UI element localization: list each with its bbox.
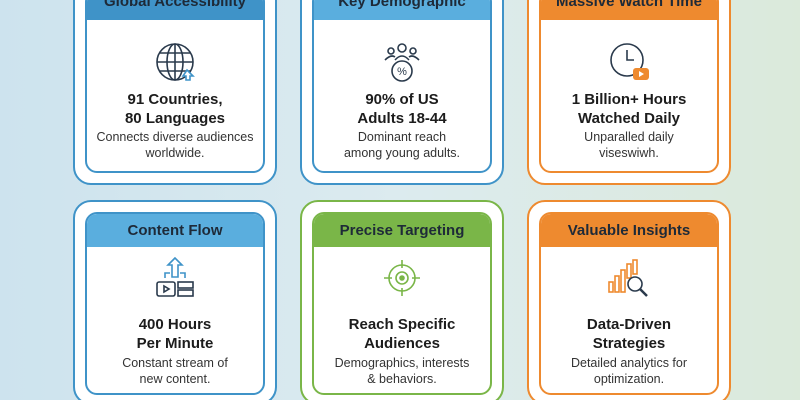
stat: 90% of US bbox=[365, 91, 439, 108]
stat: Reach Specific bbox=[349, 316, 455, 333]
stat: 80 Languages bbox=[125, 110, 225, 127]
card: precise targeting bbox=[300, 200, 504, 400]
stat: Data-Driven bbox=[587, 316, 671, 333]
icon: people percent bbox=[384, 43, 420, 82]
stat: Per Minute bbox=[137, 335, 213, 352]
description: among young adults. bbox=[344, 146, 460, 160]
card: watch time bbox=[527, 0, 731, 185]
description bbox=[344, 130, 460, 160]
header bbox=[87, 214, 263, 247]
header bbox=[87, 0, 263, 20]
icon: clock play bbox=[610, 43, 649, 80]
description bbox=[122, 356, 228, 386]
icon: upload video bbox=[156, 257, 194, 297]
header bbox=[541, 214, 717, 247]
description bbox=[335, 356, 469, 386]
stat bbox=[349, 316, 455, 352]
icon: chart magnifier bbox=[608, 259, 648, 297]
description: viseswiwh. bbox=[599, 146, 659, 160]
description bbox=[584, 130, 674, 160]
icon: people percent: % bbox=[397, 66, 407, 78]
description: & behaviors. bbox=[367, 372, 437, 386]
description bbox=[96, 130, 254, 160]
card: valuable insights bbox=[527, 200, 731, 400]
card: content flow bbox=[73, 200, 277, 400]
icon: target bbox=[384, 260, 420, 296]
stat: 1 Billion+ Hours bbox=[572, 91, 686, 108]
stat bbox=[357, 91, 447, 127]
icon: globe bbox=[156, 43, 195, 81]
header bbox=[314, 214, 490, 247]
description bbox=[571, 356, 687, 386]
description: worldwide. bbox=[145, 146, 205, 160]
description: Detailed analytics for bbox=[571, 356, 687, 370]
header bbox=[541, 0, 717, 20]
stat: 91 Countries, bbox=[127, 91, 223, 108]
description: Unparalled daily bbox=[584, 130, 674, 144]
header bbox=[314, 0, 490, 20]
stat: Watched Daily bbox=[578, 110, 680, 127]
header: Precise Targeting bbox=[340, 222, 464, 239]
header: Content Flow bbox=[128, 222, 222, 239]
stat: Strategies bbox=[593, 335, 665, 352]
card: global accessibility bbox=[73, 0, 277, 185]
card: key demographic bbox=[300, 0, 504, 185]
stat bbox=[572, 91, 686, 127]
description: new content. bbox=[140, 372, 210, 386]
description: Constant stream of bbox=[122, 356, 228, 370]
header: Valuable Insights bbox=[568, 222, 690, 239]
stat bbox=[137, 316, 213, 352]
description: Connects diverse audiences bbox=[96, 130, 254, 144]
stat: Audiences bbox=[364, 335, 440, 352]
stat bbox=[125, 91, 225, 127]
stat bbox=[587, 316, 671, 352]
stat: Adults 18-44 bbox=[357, 110, 447, 127]
description: Dominant reach bbox=[358, 130, 446, 144]
stat: 400 Hours bbox=[139, 316, 211, 333]
description: optimization. bbox=[594, 372, 664, 386]
description: Demographics, interests bbox=[335, 356, 469, 370]
